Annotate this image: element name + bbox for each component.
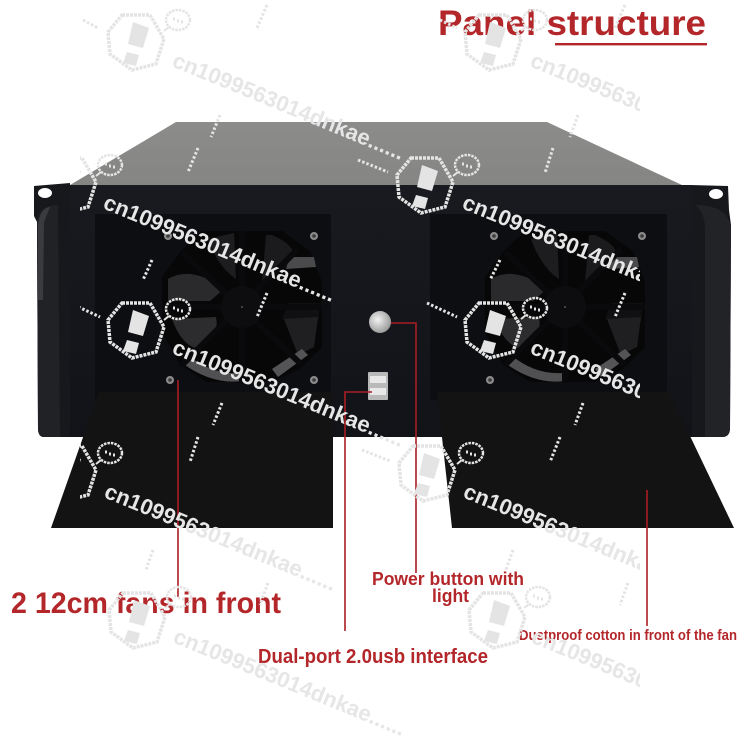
right mounting ear and handle bbox=[690, 185, 731, 437]
chassis front panel bbox=[70, 185, 692, 437]
watermark overlay: cn1099563014dnkae...... bbox=[100, 189, 339, 307]
leader line: dust cotton bbox=[646, 490, 648, 626]
watermark overlay: cn1099563014dnkae...... bbox=[460, 478, 699, 596]
left dustproof cotton flap bbox=[51, 392, 333, 528]
title: Panel structure bbox=[438, 4, 706, 43]
leader line: power button bbox=[391, 323, 416, 573]
watermark overlay: cn1099563014dnkae...... bbox=[459, 189, 698, 307]
right fan bay bbox=[430, 214, 667, 400]
right dustproof cotton flap bbox=[437, 392, 734, 528]
leader line: fans bbox=[177, 380, 179, 597]
label: USB: Dual-port 2.0usb interface bbox=[258, 646, 488, 668]
label: fans: 2 12cm fans in front bbox=[11, 587, 281, 620]
leader line: USB bbox=[345, 392, 372, 631]
left 12cm fan bbox=[162, 231, 322, 383]
chassis top panel bbox=[70, 122, 682, 185]
power button bbox=[369, 311, 391, 333]
label: power button second line: light bbox=[432, 586, 469, 606]
watermark overlay bbox=[80, 4, 640, 736]
label: power button: Power button with bbox=[372, 569, 524, 589]
watermark overlay: cn1099563014dnkae...... bbox=[101, 478, 340, 596]
left mounting ear and handle bbox=[34, 183, 72, 437]
watermark overlay: cn1099563014dnkae...... bbox=[169, 334, 408, 452]
right 12cm fan bbox=[485, 231, 645, 383]
watermark overlay: cn1099563014dnkae...... bbox=[170, 623, 409, 741]
USB ports bbox=[368, 372, 388, 400]
left fan bay bbox=[95, 214, 331, 400]
watermark overlay: cn1099563014dnkae...... bbox=[169, 47, 408, 165]
